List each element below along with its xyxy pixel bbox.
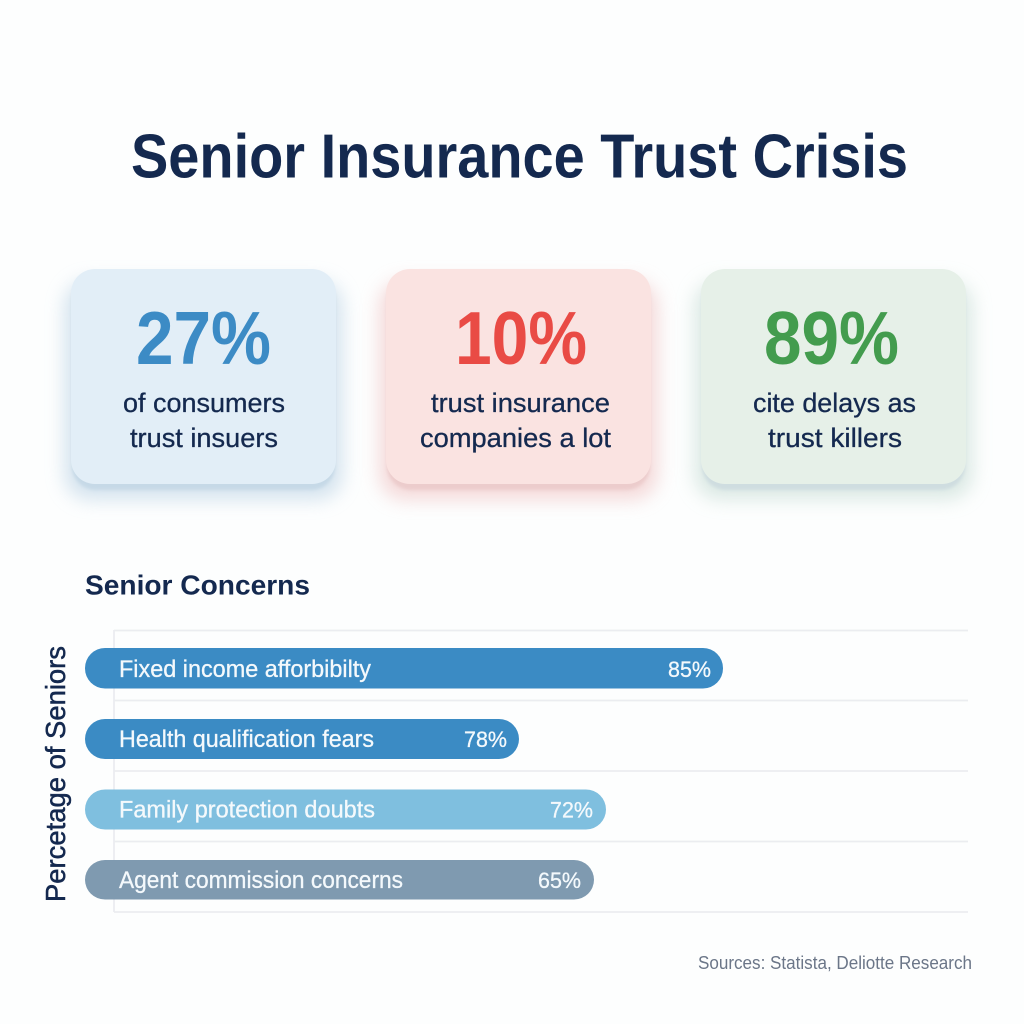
bar: health qualification fears 78%: 78% xyxy=(464,727,507,752)
stat: 89%: 89% xyxy=(764,296,899,380)
label: cite delays as trust killers: trust killers xyxy=(768,423,902,453)
bar: health qualification fears 78%: Health qualification fears xyxy=(119,726,374,753)
stat: 10%: 10% xyxy=(455,296,587,380)
bar: agent commission concerns 65%: Agent commission concerns xyxy=(119,867,403,894)
label: trust insurance companies a lot: companies a lot xyxy=(420,423,611,453)
axis label: Percetage of Seniors xyxy=(40,646,71,902)
label: cite delays as trust killers: cite delays as xyxy=(753,388,916,418)
bar: family protection doubts 72% xyxy=(85,790,606,830)
label: trust insurance companies a lot xyxy=(420,388,611,453)
bar: fixed income affordability 85% xyxy=(85,648,723,688)
sources note: Sources: Statista, Deliotte Research xyxy=(698,953,972,973)
bar: health qualification fears 78% xyxy=(85,719,519,759)
bar: agent commission concerns 65% xyxy=(85,860,594,900)
title: Senior Insurance Trust Crisis xyxy=(131,122,908,192)
label: of consumers trust insuers: trust insuers xyxy=(130,423,278,453)
panel: 27% of consumers trust insurers xyxy=(64,269,343,500)
label: of consumers trust insuers xyxy=(123,388,285,453)
bar: agent commission concerns 65%: 65% xyxy=(538,868,581,893)
bar: family protection doubts 72%: Family protection doubts xyxy=(119,796,375,824)
label: cite delays as trust killers xyxy=(753,388,916,453)
stat: 27%: 27% xyxy=(136,296,271,380)
bar: family protection doubts 72%: 72% xyxy=(550,798,593,822)
chart: senior concerns xyxy=(40,630,968,912)
section heading: Senior Concerns xyxy=(85,570,310,600)
panel: 10% trust insurance companies a lot xyxy=(379,269,658,500)
bar: fixed income affordability 85%: Fixed income afforbibilty xyxy=(119,656,371,683)
label: of consumers trust insuers: of consumers xyxy=(123,388,285,418)
label: trust insurance companies a lot: trust insurance xyxy=(431,388,610,418)
bar: fixed income affordability 85%: 85% xyxy=(668,657,711,682)
panel: 89% cite delays as trust killers xyxy=(694,269,973,500)
